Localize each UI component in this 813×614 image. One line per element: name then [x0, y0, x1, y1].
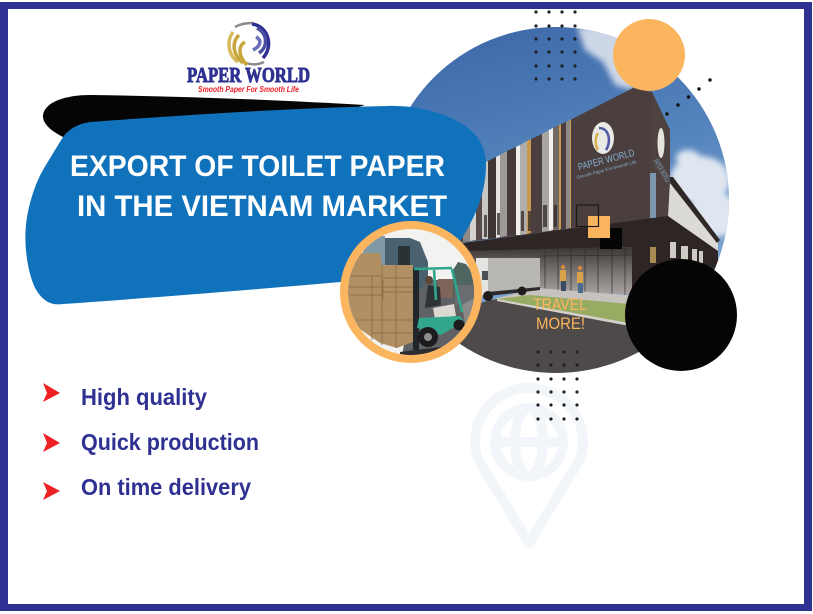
travel more label: TRAVEL	[533, 295, 587, 314]
building logo and name: Smooth Paper For Smooth Life	[576, 159, 638, 180]
pavement	[491, 288, 629, 304]
ground floor glass	[469, 247, 632, 296]
workers	[560, 265, 583, 293]
cartons	[348, 253, 413, 348]
logo: Paper World	[187, 23, 310, 94]
building logo and name: PAPER WORLD	[651, 157, 673, 184]
right ground floor windows	[650, 242, 703, 263]
truck container and cab behind	[363, 236, 385, 266]
logo swirl	[229, 23, 269, 65]
dot diagonal: right	[665, 78, 712, 116]
photo: forklift with cartons	[344, 225, 480, 365]
bullet: high quality: High quality	[81, 384, 207, 410]
bullet: on time delivery: On time delivery	[81, 474, 251, 500]
dot grid: top	[534, 10, 577, 81]
blue title blob	[25, 106, 486, 304]
delivery truck	[476, 258, 540, 301]
logo tagline: Smooth Paper For Smooth Life	[198, 85, 299, 94]
black circle	[625, 259, 737, 371]
lower floor band	[462, 216, 718, 288]
asphalt road	[460, 299, 639, 373]
logo wordmark: PAPER WORLD	[187, 63, 310, 87]
dot grid: bottom	[536, 350, 579, 421]
overlapping squares	[576, 205, 622, 249]
building logo and name	[576, 122, 673, 218]
bullet: quick production: Quick production	[81, 429, 259, 455]
clouds	[577, 27, 741, 237]
orange circle	[613, 19, 685, 91]
green strip	[498, 295, 626, 322]
window rows	[484, 205, 557, 237]
title	[70, 150, 447, 223]
icon: location pin with globe watermark	[475, 388, 583, 543]
travel more label: MORE!	[536, 314, 585, 333]
title: EXPORT OF TOILET PAPER	[70, 150, 445, 183]
forklift mast	[413, 268, 419, 350]
distant tree and truck	[453, 262, 474, 300]
background street behind forklift	[402, 280, 474, 355]
forklift roof and posts	[414, 268, 462, 312]
facade stripes	[463, 119, 571, 242]
building logo and name: PAPER WORLD	[577, 148, 636, 173]
forklift load	[433, 304, 456, 319]
forklift body	[417, 316, 463, 335]
decorative black blob	[43, 95, 365, 137]
right wing of building	[668, 182, 718, 252]
forklift wheels	[418, 327, 438, 347]
feature list	[43, 383, 259, 500]
travel more label	[533, 295, 587, 333]
title: IN THE VIETNAM MARKET	[77, 190, 447, 223]
photo: Paper World factory in circle	[410, 27, 729, 373]
forklift driver	[425, 285, 441, 308]
ground	[400, 346, 442, 355]
building upper facade	[460, 88, 670, 242]
